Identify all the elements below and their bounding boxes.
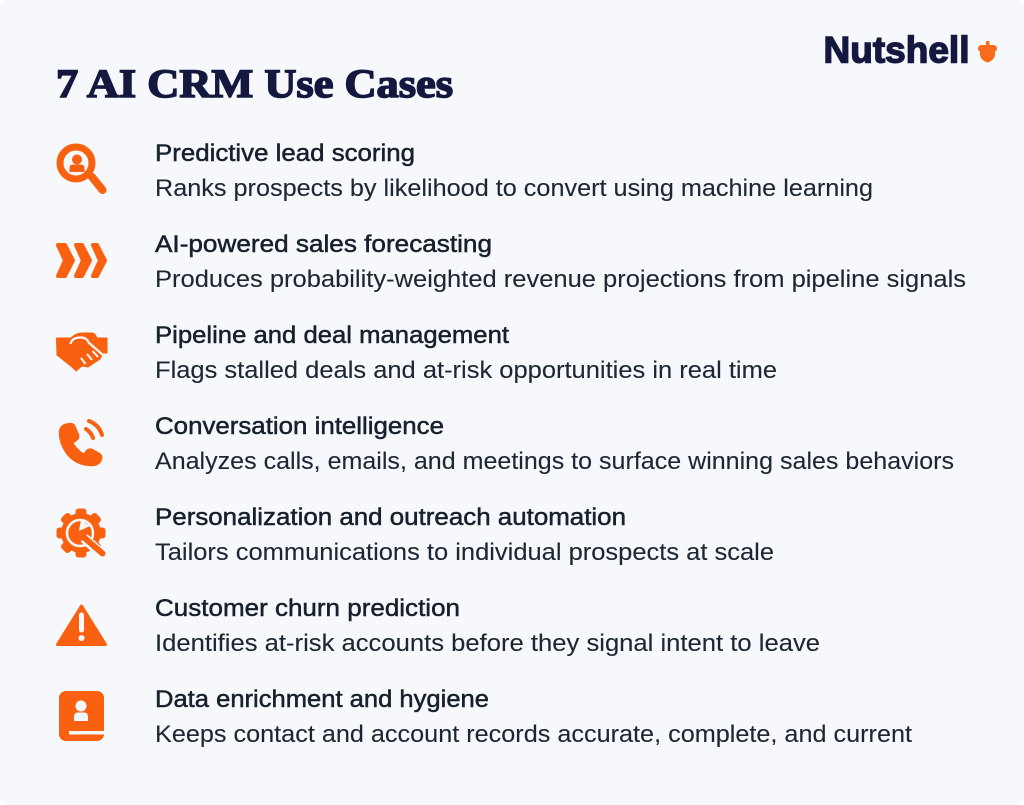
title: 7 AI CRM Use Cases xyxy=(56,61,453,106)
logo: Nutshell: Nutshell xyxy=(824,30,970,70)
icon: warning triangle xyxy=(58,606,106,644)
description: Analyzes calls, emails, and meetings to surface winning sales behaviors xyxy=(155,448,954,475)
description: Flags stalled deals and at-risk opportunities in real time xyxy=(155,357,777,384)
item 7: data enrichment and hygiene xyxy=(59,686,912,748)
item 2: AI-powered sales forecasting xyxy=(58,231,966,293)
icon: handshake xyxy=(56,333,107,371)
icon: contact book xyxy=(59,691,105,741)
description: Tailors communications to individual prospects at scale xyxy=(155,539,774,566)
item 6: customer churn prediction xyxy=(58,595,820,657)
heading: AI-powered sales forecasting xyxy=(155,231,492,258)
item 1: predictive lead scoring xyxy=(60,140,873,202)
description: Keeps contact and account records accurate, complete, and current xyxy=(155,721,912,748)
heading: Data enrichment and hygiene xyxy=(155,686,489,713)
description: Ranks prospects by likelihood to convert using machine learning xyxy=(155,175,873,202)
heading: Conversation intelligence xyxy=(155,413,444,440)
item 3: pipeline and deal management xyxy=(56,322,777,384)
icon: gear with wrench xyxy=(56,508,106,558)
item 4: conversation intelligence xyxy=(60,413,954,475)
description: Produces probability-weighted revenue projections from pipeline signals xyxy=(155,266,966,293)
description: Identifies at-risk accounts before they signal intent to leave xyxy=(155,630,820,657)
heading: Predictive lead scoring xyxy=(155,140,415,167)
icon: triple chevrons xyxy=(58,245,105,276)
heading: Customer churn prediction xyxy=(155,595,460,622)
icon: phone with signal waves xyxy=(60,421,102,465)
icon: acorn xyxy=(978,41,997,62)
heading: Personalization and outreach automation xyxy=(155,504,626,531)
heading: Pipeline and deal management xyxy=(155,322,509,349)
icon: magnifier with person xyxy=(60,147,102,190)
item 5: personalization and outreach automation xyxy=(56,504,774,566)
